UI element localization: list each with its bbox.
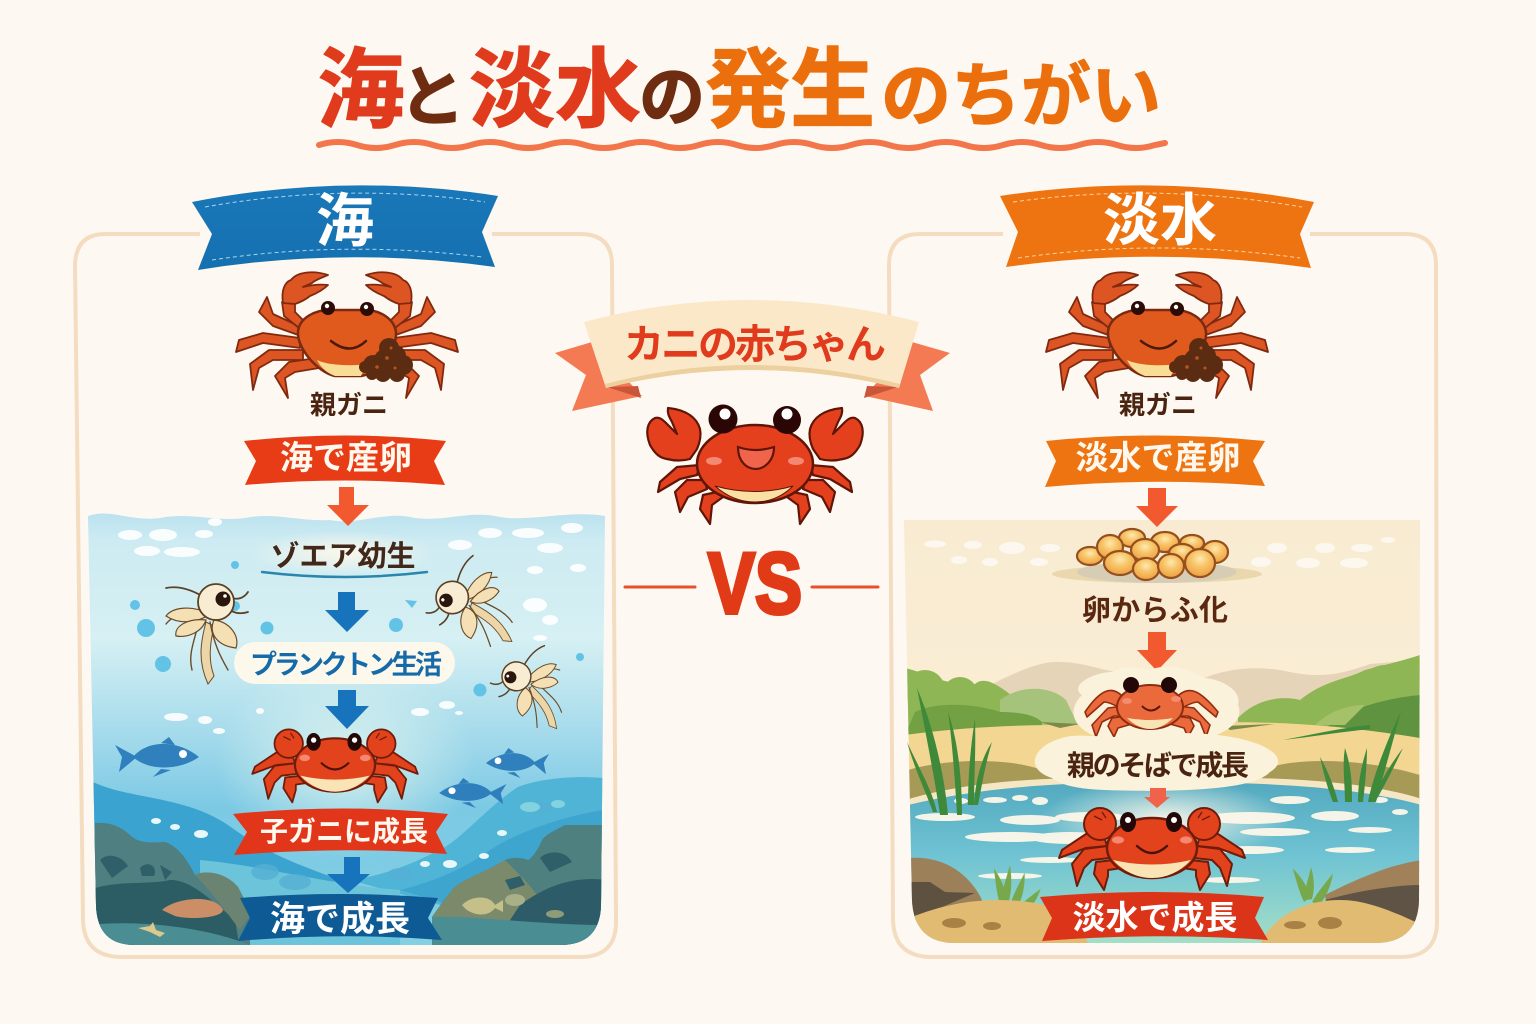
starfish <box>138 922 165 937</box>
title: 海 <box>318 42 404 139</box>
pill: plankton life: プランクトン生活 <box>250 650 442 680</box>
ribbon: growth at sea <box>238 894 442 941</box>
sea scene <box>85 505 610 950</box>
ribbon: growth in freshwater <box>1040 892 1268 941</box>
ribbon tails <box>555 342 950 411</box>
reef fish <box>462 898 503 914</box>
pond <box>910 778 1420 842</box>
zoea larva 3 <box>487 643 585 746</box>
title: の <box>639 60 705 134</box>
panel: freshwater <box>889 185 1437 957</box>
central heading ribbon: カニの赤ちゃん <box>624 323 886 367</box>
title: 発生 <box>705 42 875 139</box>
small bubbles low <box>151 818 507 868</box>
ribbon: spawning at sea <box>244 436 446 485</box>
banner: freshwater <box>1000 185 1314 268</box>
ribbon: growth into juvenile: 子ガニに成長 <box>260 816 428 847</box>
central heading ribbon <box>555 300 950 411</box>
rock left <box>90 823 250 950</box>
panel: sea <box>75 185 616 957</box>
ribbon: spawning in freshwater: 淡水で産卵 <box>1076 439 1240 476</box>
baby crab <box>647 404 863 524</box>
label: parent crab: 親ガニ <box>1119 390 1197 420</box>
light glow <box>230 685 459 813</box>
juvenile crab <box>252 729 418 802</box>
ribbon: spawning in freshwater <box>1045 436 1265 487</box>
ribbon: growth at sea: 海で成長 <box>270 900 410 939</box>
arrow: to young crab <box>1137 632 1177 671</box>
sand foreground <box>914 900 1088 943</box>
far hills <box>980 660 1420 730</box>
zoea larva 1 <box>166 584 248 684</box>
egg cluster <box>1052 529 1262 583</box>
arrow: to eggs <box>1136 488 1178 527</box>
sea patches <box>251 864 398 890</box>
young crab <box>1085 677 1218 737</box>
VS mark: VS <box>708 536 802 632</box>
cloud with label: growth near parent <box>1035 733 1278 791</box>
arrow: to adult <box>1144 788 1170 808</box>
zoea larva 2 <box>421 553 537 668</box>
parent crab with eggs <box>1046 272 1268 398</box>
reeds left <box>907 688 992 815</box>
arrow: to juvenile <box>325 690 369 729</box>
larvae <box>166 553 585 746</box>
title wavy underline <box>319 142 1165 148</box>
left rock <box>911 858 982 925</box>
title <box>318 42 1161 139</box>
sea hills <box>93 782 340 950</box>
bubbles <box>130 561 584 696</box>
arrow: to sea growth <box>327 857 370 893</box>
banner: freshwater: 淡水 <box>1103 189 1217 253</box>
right rock <box>1325 860 1422 925</box>
reeds right <box>1283 711 1403 802</box>
adult crab near parent <box>1059 808 1245 890</box>
cloud with label: growth near parent: 親のそばで成長 <box>1067 750 1249 781</box>
parent crab with eggs <box>236 272 458 398</box>
water highlights <box>915 795 1408 883</box>
title: 淡水 <box>469 42 641 139</box>
panel frame: freshwater <box>889 234 1437 957</box>
title: と <box>399 60 465 134</box>
pill: plankton life <box>234 642 455 684</box>
clam <box>162 899 223 918</box>
title: のちがい <box>881 57 1161 135</box>
fish center <box>439 778 506 808</box>
dark shoreline details <box>1040 722 1275 730</box>
banner: sea: 海 <box>316 189 374 254</box>
label: hatching: 卵からふ化 <box>1082 594 1228 627</box>
green bushes <box>905 655 1420 740</box>
ribbon: growth into juvenile <box>233 808 448 855</box>
sky clouds <box>924 537 1395 568</box>
ribbon: growth in freshwater: 淡水で成長 <box>1072 899 1238 936</box>
grass tufts <box>994 865 1333 903</box>
surface foam <box>118 518 586 734</box>
freshwater scene <box>900 515 1425 945</box>
fish right <box>486 748 549 778</box>
far bank shade <box>908 761 1420 800</box>
ribbon: spawning at sea: 海で産卵 <box>280 439 412 476</box>
arrow: to plankton <box>325 592 369 632</box>
fish <box>115 737 549 808</box>
arrow: to zoea <box>327 487 369 526</box>
label: zoea: ゾエア幼生 <box>270 540 416 573</box>
label: zoea <box>248 531 438 577</box>
banner: sea <box>192 185 498 270</box>
fish large <box>115 737 199 777</box>
cloud with young crab <box>1074 667 1239 746</box>
rock right <box>432 825 605 950</box>
label: parent crab: 親ガニ <box>310 390 388 420</box>
panel frame: sea <box>75 234 616 957</box>
sand bank <box>905 722 1420 830</box>
